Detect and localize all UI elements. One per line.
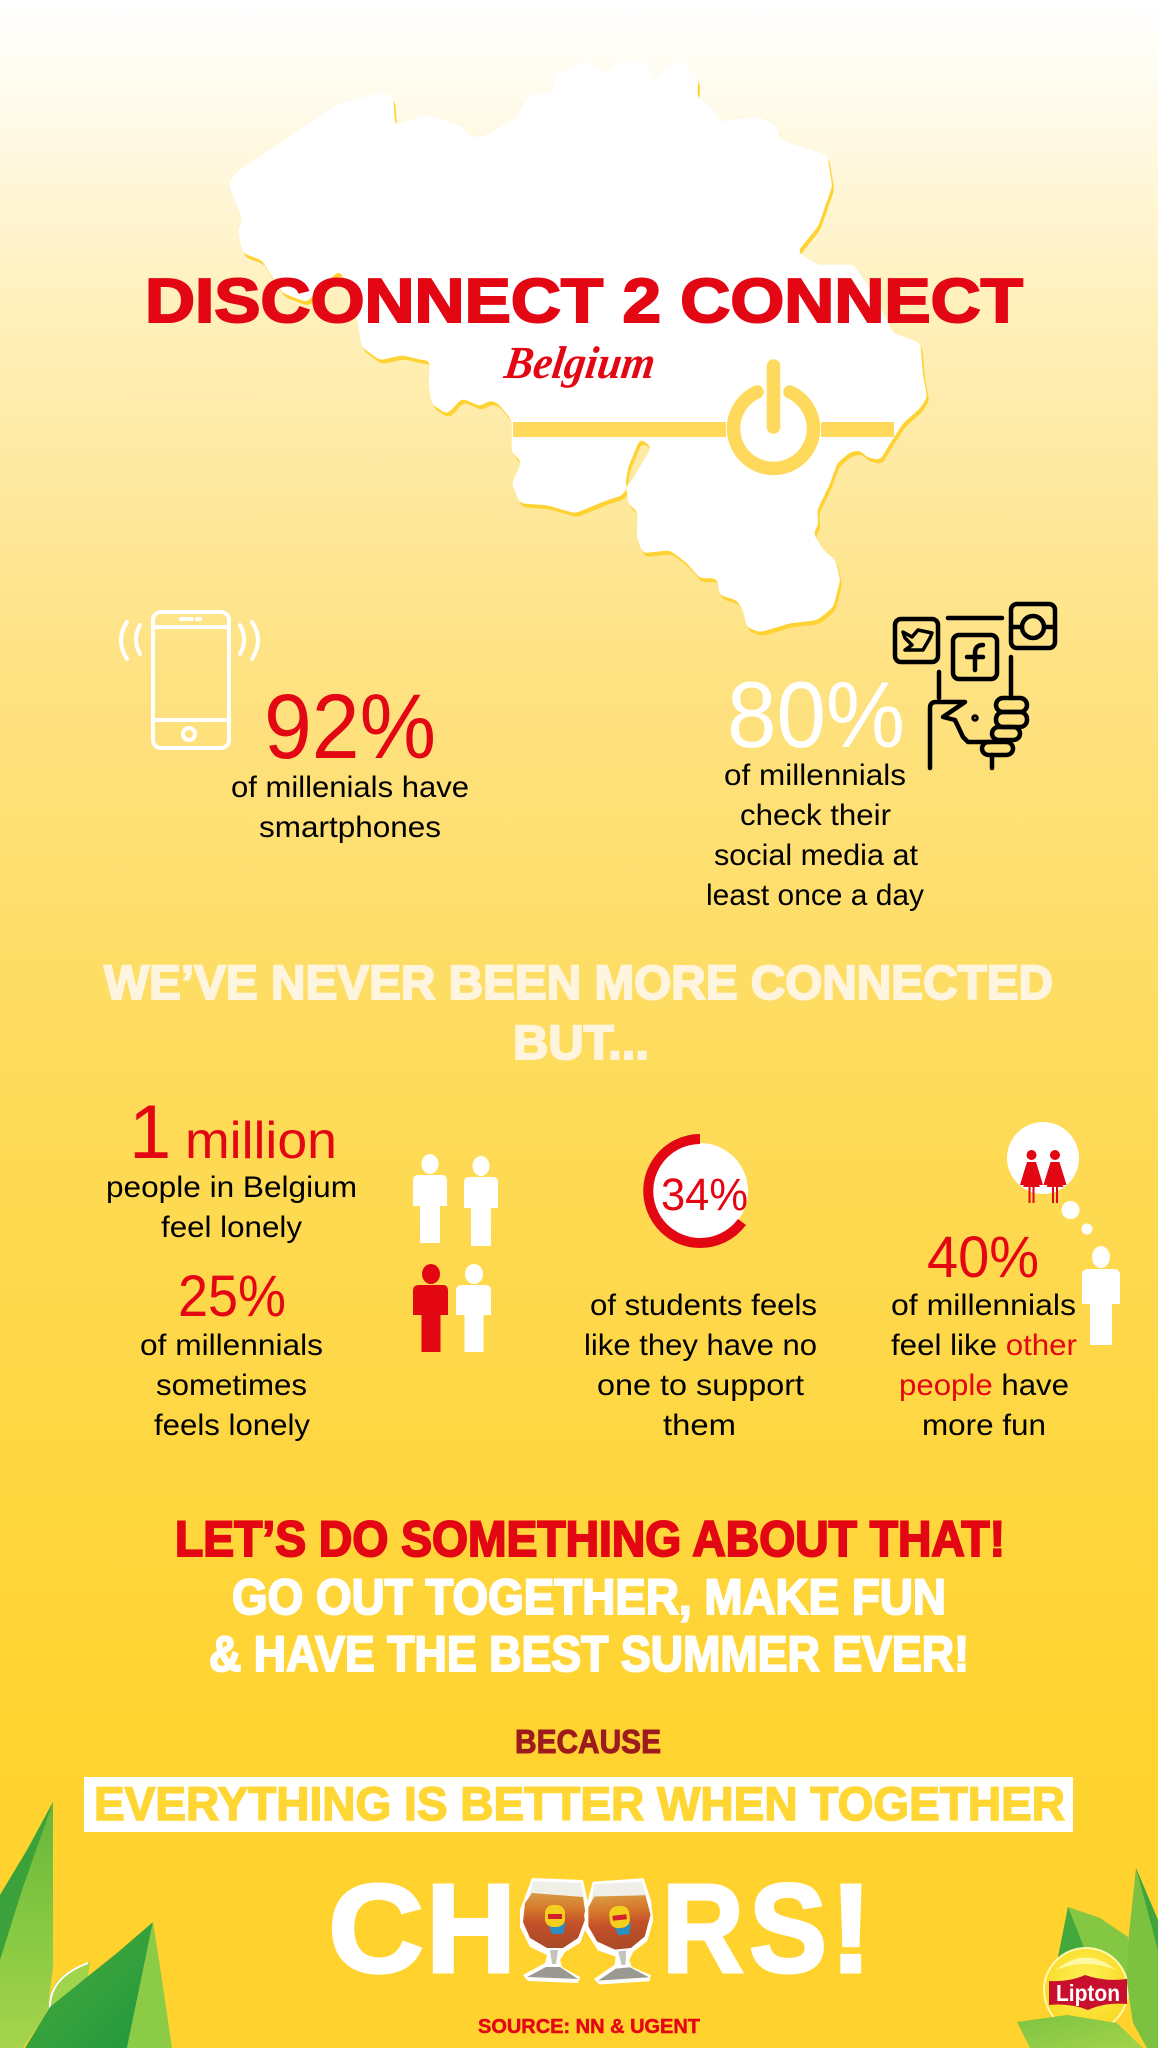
glass left [520,1878,588,1983]
description: social media at [714,839,919,872]
letters CH and RS: S [749,1858,827,1999]
map of Belgium with power button [230,62,929,636]
40 percent: 40% [927,1225,1039,1290]
25 percent: 25% [178,1264,286,1329]
icon: red and white person [413,1264,491,1352]
description: smartphones [259,811,441,844]
glass right [581,1876,659,1987]
leaf: tall left [0,1802,53,2048]
logo: Lipton: Lipton [1056,1980,1120,2006]
description: feel like other [891,1329,1077,1362]
80 percent: 80% [727,662,905,767]
description [584,1289,817,1442]
description: least once a day [706,879,924,912]
description: more fun [922,1409,1046,1442]
banner: everything is better when together: EVERYTHING IS BETTER WHEN TOGETHER [94,1777,1065,1830]
letters CH and RS: ! [830,1858,872,1999]
map silhouette [230,62,927,632]
stat: 92% smartphones [121,612,469,844]
description [706,759,924,912]
because label: BECAUSE [515,1723,661,1760]
heading: never been more connected: WE’VE NEVER BEEN MORE CONNECTED [104,957,1053,1010]
description: them [663,1409,736,1442]
lime slice [48,1962,90,2012]
description: sometimes [156,1369,307,1402]
description: of millennials [724,759,906,792]
34 percent: 34% [661,1169,748,1220]
stat: 1 million lonely [106,1090,498,1246]
power button icon [734,366,814,468]
description: people have [899,1369,1069,1402]
icon: hand holding social media [895,604,1055,768]
1 million [129,1090,337,1175]
CHEERS wordmark [328,1858,872,1999]
map shadow [232,66,929,636]
leaf: front left [25,1922,172,2048]
description: like they have no [584,1329,817,1362]
leaf: back right [1058,1907,1128,2000]
call to action: & HAVE THE BEST SUMMER EVER! [209,1626,969,1682]
1 million: 1 [129,1090,171,1175]
description [106,1171,357,1244]
subtitle: Belgium [501,337,659,388]
description: people in Belgium [106,1171,357,1204]
description: of millennials [891,1289,1076,1322]
description: feels lonely [154,1409,310,1442]
stat: 34% students [584,1139,817,1442]
leaf: tall right [1127,1868,1158,2048]
source: SOURCE: NN & UGENT [478,2016,700,2038]
letters CH and RS: C [328,1858,424,1999]
call to action [175,1511,1005,1682]
donut chart 34 percent [648,1139,748,1243]
letters CH and RS: R [662,1858,744,1999]
stat: 40% other people [891,1122,1120,1442]
letters CH and RS: H [426,1858,516,1999]
description: of millenials have [231,771,469,804]
call to action: LET’S DO SOMETHING ABOUT THAT! [175,1511,1005,1567]
stat: 80% social media [706,604,1055,912]
description [891,1289,1077,1442]
right leaves and Lipton logo [1017,1868,1158,2048]
description: of millennials [140,1329,323,1362]
icon: thought bubble with person [1007,1122,1120,1345]
letters CH and RS [328,1858,872,1999]
stat: 25% lonely [140,1264,491,1442]
description: one to support [597,1369,805,1402]
92 percent: 92% [264,676,436,778]
description [231,771,469,844]
power line [513,422,894,437]
description [140,1329,323,1442]
description: of students feels [590,1289,817,1322]
icon: vibrating smartphone [121,612,258,748]
description: feel lonely [161,1211,302,1244]
description: check their [740,799,891,832]
icon: two white people [413,1154,498,1246]
call to action: GO OUT TOGETHER, MAKE FUN [232,1569,946,1625]
heading: never been more connected [104,957,1053,1070]
1 million: million [185,1112,337,1170]
heading: never been more connected: BUT... [513,1017,649,1070]
logo: Lipton [1044,1948,1128,2032]
left leaves [0,1802,172,2048]
leaf: bottom right [1017,2015,1143,2048]
title: DISCONNECT 2 CONNECT [145,267,1023,336]
